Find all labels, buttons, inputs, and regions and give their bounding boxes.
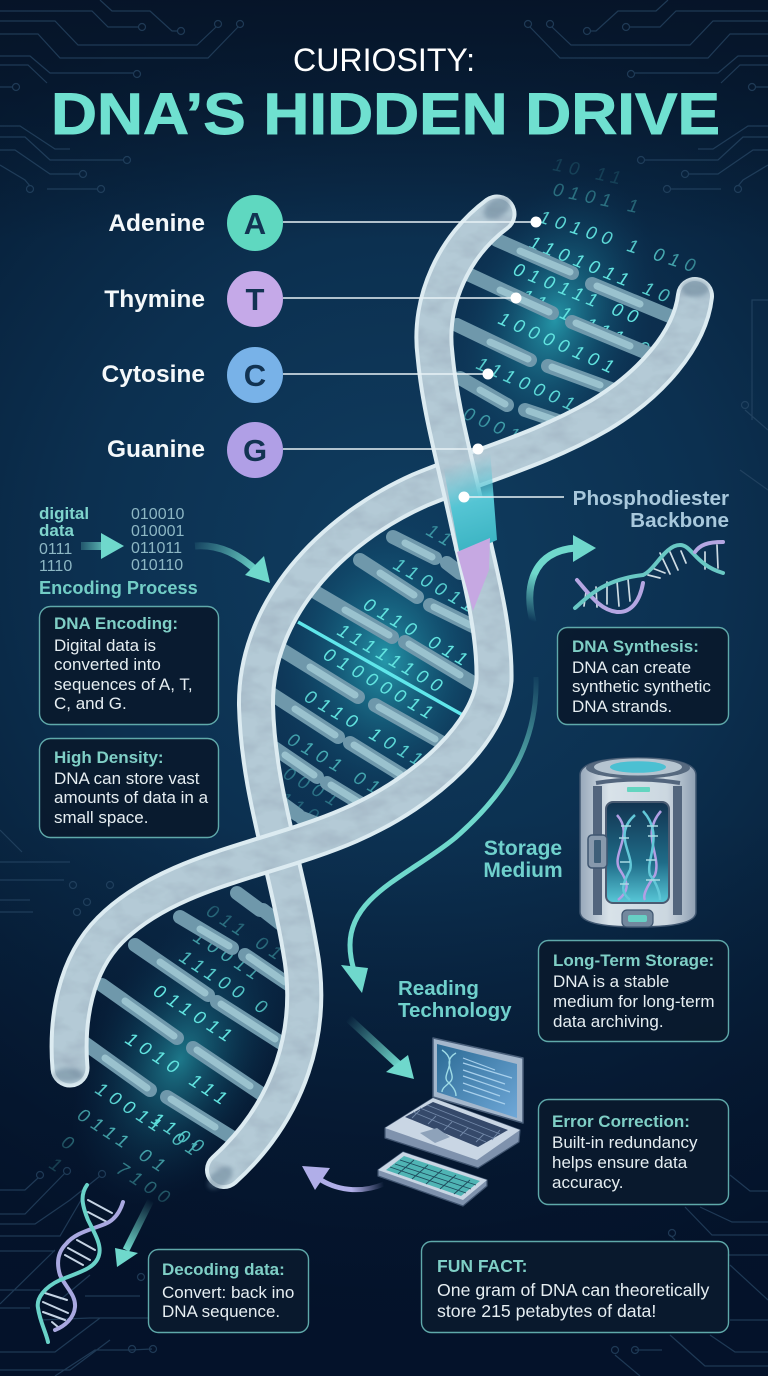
binary stream lower: 1100 [148,1108,213,1160]
highlighted teal section of backbone [443,450,497,556]
label: phosphodiester backbone: Phosphodiester [573,487,729,510]
panel: error correction: accuracy. [552,1173,624,1192]
panel: DNA encoding [40,606,218,724]
binary stream upper: 1101011 10 [527,231,678,309]
label: guanine [107,422,484,478]
panel: error correction [538,1100,728,1204]
binary stream middle [284,526,468,816]
arrow: to laptop [348,1018,414,1079]
encoding diagram: 010001 [131,523,184,540]
icon: synthetic DNA strand [575,542,723,612]
binary stream upper: 10 11 [551,153,629,189]
label: phosphodiester backbone: Backbone [630,509,729,532]
panel: DNA encoding: Digital data is [54,636,156,655]
panel: DNA synthesis: DNA can create [572,658,691,677]
panel: fun fact: One gram of DNA can theoretically [437,1280,709,1300]
binary stream upper: 11100011 [473,352,597,423]
label: adenine: A [244,206,266,241]
encoding diagram: data [39,521,74,540]
binary stream middle: 0110 011 [360,593,477,673]
title line two: DNA’S HIDDEN DRIVE [51,82,720,147]
circuit traces side [0,300,768,916]
encoding diagram [39,504,198,598]
binary stream upper [464,159,696,435]
panel: long-term storage: data archiving. [553,1012,664,1031]
binary stream middle: 0101 0110 [284,728,416,817]
panel: long-term storage: Long-Term Storage: [553,951,714,970]
binary stream lower: 1010 111 [122,1028,236,1112]
panel: error correction: helps ensure data [552,1153,688,1172]
strand end shading [53,192,709,1194]
strand B [224,296,695,1170]
arrow: long curve to reading technology [341,677,536,993]
binary stream lower: 0111 01 [74,1104,174,1179]
label: reading technology: Reading [398,977,479,1000]
panel: decoding data [148,1250,308,1332]
panel: fun fact: FUN FACT: [437,1256,527,1276]
binary stream middle: 110 [423,519,475,561]
binary stream middle: 0110 1011 [301,685,432,773]
panel: error correction: Error Correction: [552,1112,690,1131]
screen content [442,1050,512,1104]
label: guanine: Guanine [107,436,205,463]
arrow: to synthesis [530,535,596,622]
binary stream upper: 10100 1 010 [537,206,704,278]
binary stream lower: 10011 [190,926,268,987]
icon: storage cylinder [580,758,696,927]
binary stream lower: 1 [46,1153,71,1179]
panel: high density [40,738,218,838]
icon: small DNA [38,1185,123,1342]
lavender tip of backbone [457,538,490,611]
binary stream upper: 00010 [460,402,543,455]
binary stream upper: 11 1 111 0 [518,284,658,362]
binary stream middle: 0001 10 [280,762,385,835]
panel: DNA encoding: sequences of A, T, [54,675,193,694]
binary stream lower: 011011 [150,980,241,1049]
label: adenine: Adenine [108,210,205,237]
icon: external keyboard [378,1152,487,1206]
label: adenine [108,195,542,251]
panel: fun fact [422,1242,728,1332]
encoding diagram: 011011 [131,540,182,557]
label: storage medium: Storage [484,837,562,860]
label: thymine: Thymine [104,286,205,313]
base pair rungs [83,240,672,1138]
circuit traces top left [0,0,244,192]
panel: fun fact: store 215 petabytes of data! [437,1301,656,1321]
encoding diagram: 010010 [131,506,184,523]
title [51,42,720,147]
binary stream upper: 0101 1 [551,178,646,218]
title line one: CURIOSITY: [293,42,475,78]
icon: laptop [385,1038,523,1168]
binary stream middle: 11111100 [334,619,451,699]
panel: long-term storage: DNA is a stable [553,972,669,991]
arrow: down to small DNA [115,1200,151,1267]
circuit traces top right [524,0,768,192]
binary stream lower: 0 [58,1131,83,1157]
label: thymine: T [246,282,265,317]
panel: long-term storage: medium for long-term [553,992,715,1011]
label: phosphodiester backbone [458,487,729,532]
binary stream middle: 01000011 [320,643,442,726]
panel: high density: High Density: [54,748,164,767]
panel: DNA synthesis [558,628,728,724]
label: cytosine: Cytosine [102,361,205,388]
panel: decoding data: DNA sequence. [162,1302,280,1321]
base labels [102,195,542,478]
glow behind binary [28,147,696,1241]
panel: decoding data: Decoding data: [162,1260,285,1279]
panel: high density: amounts of data in a [54,788,209,807]
binary stream lower [48,906,280,1202]
binary stream upper: 010111 00 [511,258,647,330]
DNA helix [53,192,709,1194]
panel: DNA synthesis: synthetic synthetic [572,677,711,696]
binary stream lower: 10011 01 [92,1078,207,1163]
panel: DNA synthesis: DNA strands. [572,697,672,716]
bright hydrogen bond line [298,622,468,718]
binary stream lower: 7100 [113,1158,179,1211]
binary stream upper: 10000101 [495,307,623,380]
encoding diagram: 1110 [39,558,72,575]
label: cytosine [102,347,494,403]
strand A [69,214,497,1068]
label: storage medium [483,837,563,882]
label: guanine: G [243,433,267,468]
label: storage medium: Medium [483,859,563,882]
panel: error correction: Built-in redundancy [552,1133,698,1152]
heading: encoding process: Encoding Process [39,578,198,598]
arrow: digital to binary [81,533,124,559]
panel: DNA encoding: DNA Encoding: [54,614,178,633]
panel: DNA synthesis: DNA Synthesis: [572,637,699,656]
panel: high density: small space. [54,808,148,827]
binary stream lower: 11100 0 [176,946,276,1021]
label: thymine [104,271,522,327]
panel: DNA encoding: C, and G. [54,694,127,713]
label: reading technology [398,977,512,1022]
panel: long-term storage [538,940,728,1042]
circuit traces bottom right [612,1175,768,1376]
encoding diagram: 0111 [39,541,72,558]
encoding diagram: digital [39,504,89,523]
binary stream middle: 110011 [390,553,483,619]
circuit traces bottom left [0,1168,156,1376]
binary stream lower: 011 01 1 [203,900,314,982]
arrow: keyboard back to helix [302,1166,384,1190]
encoding diagram: 010110 [131,557,183,574]
panel: decoding data: Convert: back ino [162,1283,294,1302]
small helices in window [617,811,661,900]
panel: high density: DNA can store vast [54,769,200,788]
label: reading technology: Technology [398,999,512,1022]
binary stream middle: 11010 [276,787,356,846]
arrow: encoding to helix [195,546,270,583]
label: cytosine: C [244,358,266,393]
panel: DNA encoding: converted into [54,655,161,674]
